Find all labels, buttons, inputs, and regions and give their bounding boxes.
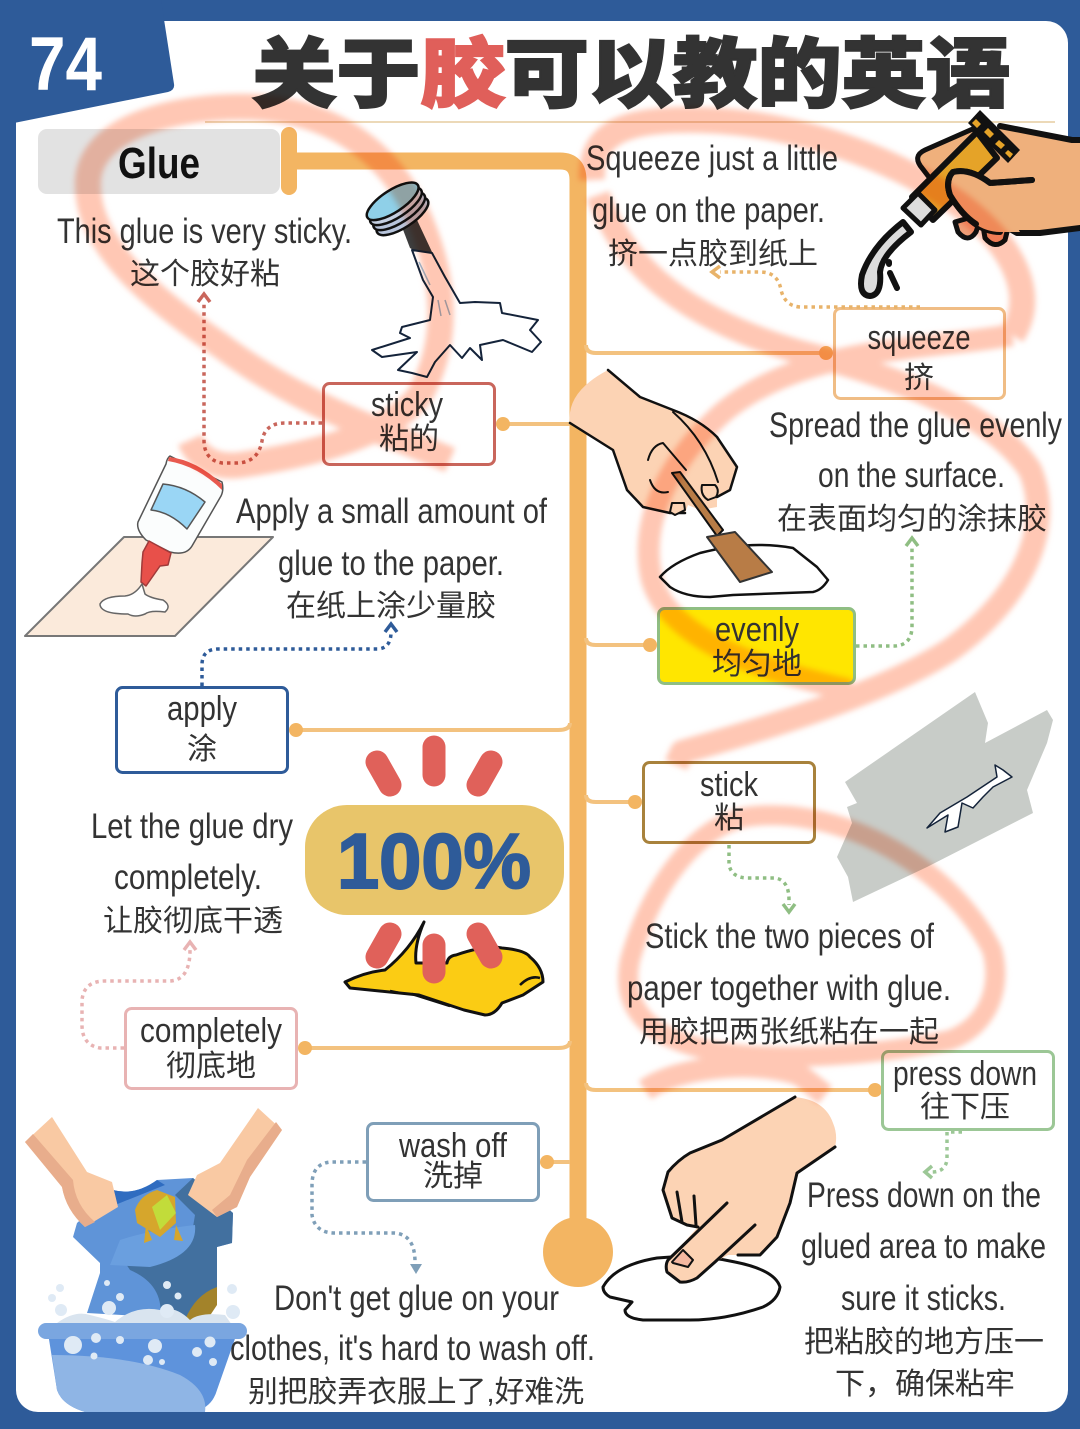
text: apply sentence: Apply a small amount of bbox=[236, 492, 547, 531]
marker scribble overlay bbox=[88, 107, 1038, 1095]
text: press sentence: sure it sticks. bbox=[841, 1279, 1006, 1318]
text: apply sentence bbox=[236, 492, 547, 623]
word box: wash off: 洗掉 bbox=[423, 1160, 483, 1193]
text: stick sentence: paper together with glue. bbox=[627, 969, 951, 1008]
text: press sentence bbox=[801, 1176, 1046, 1401]
word box: stick bbox=[644, 762, 814, 842]
word box: completely bbox=[126, 1008, 296, 1088]
word box: evenly bbox=[658, 608, 854, 684]
word box: wash off: wash off bbox=[398, 1127, 507, 1165]
icon: hand squeezing glue tube bbox=[861, 110, 1080, 296]
heading: Glue: Glue bbox=[118, 139, 200, 188]
word box: apply: 涂 bbox=[187, 733, 217, 766]
text: apply sentence: 在纸上涂少量胶 bbox=[286, 590, 496, 623]
word box: press down: press down bbox=[893, 1055, 1037, 1093]
text: apply sentence: glue to the paper. bbox=[278, 544, 504, 583]
word box: sticky: sticky bbox=[371, 386, 443, 424]
word box: wash off bbox=[368, 1124, 538, 1200]
arrow: evenly to sentence bbox=[856, 538, 918, 646]
text: press sentence: 下，确保粘牢 bbox=[835, 1368, 1015, 1401]
word box: evenly: 均匀地 bbox=[712, 648, 802, 681]
word box: completely: 彻底地 bbox=[166, 1050, 256, 1083]
arrow: wash off to sentence bbox=[312, 1162, 422, 1274]
arrow: stick to sentence bbox=[729, 845, 795, 912]
word box: apply: apply bbox=[167, 690, 237, 728]
text: spread sentence bbox=[769, 406, 1062, 536]
text: sticky sentence: This glue is very sticky. bbox=[57, 212, 352, 251]
text: spread sentence: 在表面均匀的涂抹胶 bbox=[777, 503, 1047, 536]
word box: evenly: evenly bbox=[715, 611, 799, 649]
text: sticky sentence bbox=[57, 212, 352, 291]
title: 关于胶可以教的英语 bbox=[252, 13, 1010, 123]
text: squeeze sentence: glue on the paper. bbox=[592, 191, 825, 230]
icon: pointing finger pressing bbox=[603, 1097, 836, 1320]
word box: squeeze: 挤 bbox=[904, 362, 934, 395]
word box: apply bbox=[116, 688, 288, 772]
timeline spine bbox=[281, 127, 882, 1287]
number tab: 74 bbox=[29, 22, 102, 107]
arrow: press down to sentence bbox=[925, 1132, 962, 1178]
text: wash sentence: 别把胶弄衣服上了,好难洗 bbox=[248, 1376, 584, 1409]
text: dry sentence: Let the glue dry bbox=[91, 807, 293, 846]
word box: press down: 往下压 bbox=[920, 1091, 1010, 1124]
text: press sentence: 把粘胶的地方压一 bbox=[804, 1326, 1044, 1359]
word box: press down bbox=[882, 1052, 1054, 1130]
text: stick sentence: Stick the two pieces of bbox=[645, 917, 934, 956]
text: squeeze sentence: Squeeze just a little bbox=[586, 139, 838, 178]
icon: washing shirt in basin bbox=[25, 1108, 282, 1412]
word box: sticky bbox=[324, 384, 494, 464]
text: dry sentence bbox=[91, 807, 293, 938]
heading: Glue bbox=[38, 129, 280, 194]
text: dry sentence: completely. bbox=[114, 858, 262, 897]
icon: tape with glue bbox=[837, 692, 1053, 902]
word box: squeeze bbox=[834, 308, 1004, 398]
text: spread sentence: on the surface. bbox=[818, 456, 1005, 495]
word box: squeeze: squeeze bbox=[868, 319, 970, 357]
text: squeeze sentence: 挤一点胶到纸上 bbox=[608, 238, 818, 271]
word box: sticky: 粘的 bbox=[379, 423, 439, 456]
icon: 100 percent badge: 100% bbox=[337, 817, 531, 905]
text: sticky sentence: 这个胶好粘 bbox=[130, 258, 280, 291]
text: wash sentence: clothes, it's hard to wash off. bbox=[230, 1329, 595, 1368]
text: stick sentence bbox=[627, 917, 951, 1049]
icon: 100 percent badge bbox=[305, 747, 564, 1015]
arrow: apply to sentence bbox=[202, 624, 397, 686]
word box: completely: completely bbox=[140, 1012, 282, 1050]
icon: hand spreading glue bbox=[570, 370, 828, 597]
text: wash sentence bbox=[230, 1279, 595, 1409]
arrow: completely to sentence bbox=[82, 942, 196, 1048]
arrow: sticky to sentence bbox=[198, 294, 322, 463]
arrow: squeeze to sentence bbox=[712, 266, 920, 307]
icon: glue tube with splat bbox=[361, 176, 541, 377]
text: wash sentence: Don't get glue on your bbox=[274, 1279, 559, 1318]
text: squeeze sentence bbox=[586, 139, 838, 271]
text: dry sentence: 让胶彻底干透 bbox=[103, 905, 283, 938]
icon: glue bottle on paper bbox=[25, 456, 273, 636]
number tab bbox=[0, 0, 174, 123]
word box: stick: stick bbox=[700, 766, 759, 804]
text: stick sentence: 用胶把两张纸粘在一起 bbox=[639, 1016, 939, 1049]
word box: stick: 粘 bbox=[714, 802, 744, 835]
